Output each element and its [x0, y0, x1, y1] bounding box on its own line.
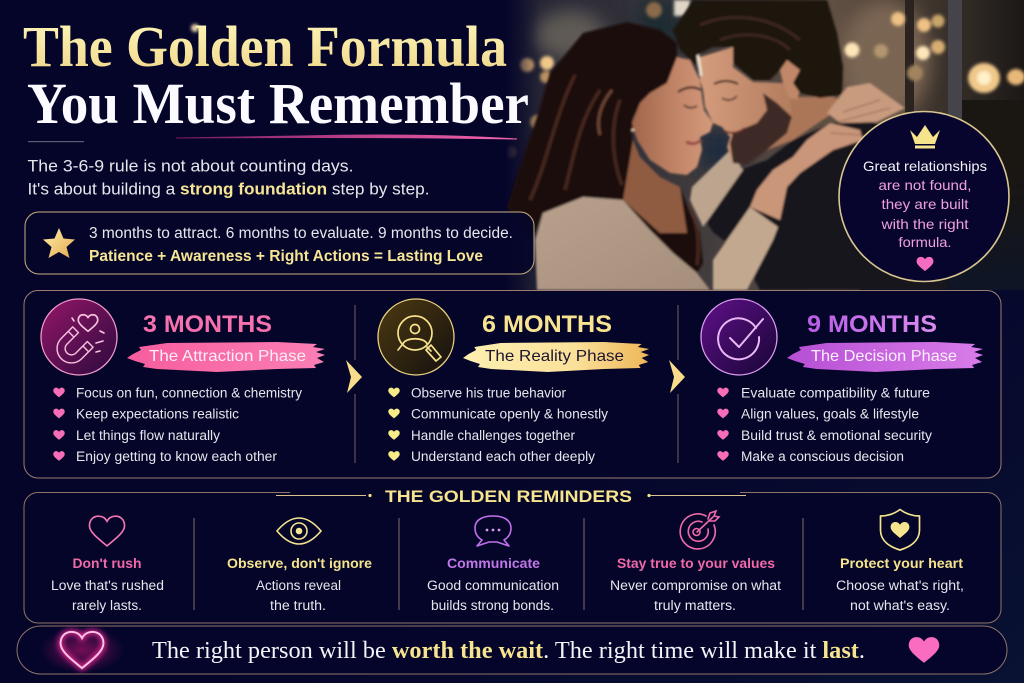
- beard: [730, 93, 792, 165]
- phase: 6 months: [378, 299, 649, 464]
- bullet list: Enjoy getting to know each other: [76, 449, 278, 464]
- title: You Must Remember: [27, 71, 529, 136]
- reminder text: not what's easy.: [850, 598, 950, 613]
- icon: eye: [277, 518, 321, 544]
- badge text: they are built: [882, 196, 969, 212]
- icon: magnet and heart: [41, 299, 117, 375]
- hands: [750, 123, 863, 220]
- formula line one: 3 months to attract. 6 months to evaluate. 9 months to decide.: [89, 225, 513, 242]
- bullet list: Keep expectations realistic: [76, 406, 239, 422]
- reminder text: truly matters.: [654, 598, 736, 613]
- callout: formula box: [25, 212, 534, 274]
- bullet list: Communicate openly & honestly: [411, 406, 608, 422]
- bullet list: [388, 386, 608, 464]
- badge text: [863, 158, 987, 250]
- section heading: THE GOLDEN REMINDERS: [385, 487, 632, 506]
- reminder text: builds strong bonds.: [431, 598, 554, 613]
- formula line two: Patience + Awareness + Right Actions = Lasting Love: [89, 248, 483, 265]
- title underline: [28, 135, 517, 142]
- reminder text: Actions reveal: [256, 578, 341, 593]
- icon: check circle: [701, 299, 777, 375]
- man's neck: [767, 97, 847, 150]
- reminder: observe: [227, 518, 372, 613]
- man's face: [700, 47, 793, 163]
- icon: crown: [910, 125, 940, 148]
- reminder text: Choose what's right,: [836, 578, 964, 593]
- man's ear: [780, 60, 803, 100]
- phase label banner: The Decision Phase: [811, 348, 957, 365]
- reminder heading: Communicate: [447, 555, 540, 571]
- icon: heart outline: [89, 516, 125, 546]
- reminder heading: Protect your heart: [840, 555, 963, 571]
- facial details: [684, 96, 737, 108]
- woman's neck: [623, 140, 687, 233]
- panel: golden reminders: [24, 487, 1001, 623]
- badge text: formula.: [898, 234, 952, 250]
- closing message: The right person will be worth the wait. The right time will make it last.: [152, 638, 865, 664]
- phase: 3 months: [41, 299, 325, 464]
- bullet list: Evaluate compatibility & future: [741, 386, 930, 400]
- icon: chat bubble: [475, 516, 511, 546]
- reminder text: [610, 578, 781, 613]
- bullet list: Make a conscious decision: [741, 449, 904, 464]
- heading: 6 MONTHS: [482, 311, 612, 338]
- intro text: The 3-6-9 rule is not about counting days.: [28, 158, 353, 176]
- bullet list: Understand each other deeply: [411, 449, 595, 464]
- heading: 9 MONTHS: [807, 311, 937, 338]
- arrow: [346, 360, 362, 393]
- bullet list: Align values, goals & lifestyle: [741, 406, 919, 422]
- woman's sweater: [535, 197, 710, 290]
- arrow: [669, 360, 685, 393]
- bullet list: Build trust & emotional security: [741, 428, 932, 443]
- intro text: It's about building a strong foundation step by step.: [28, 180, 430, 198]
- closing banner: [17, 626, 1007, 674]
- bullet list: [53, 386, 302, 464]
- reminder text: [256, 578, 341, 613]
- reminder: don't rush: [51, 516, 164, 613]
- phase label banner: [463, 342, 649, 372]
- icon: pink heart: [909, 637, 939, 663]
- phase label banner: The Attraction Phase: [149, 348, 306, 365]
- reminder text: Good communication: [427, 578, 559, 593]
- reminder text: [427, 578, 559, 613]
- heading: 3 MONTHS: [143, 311, 272, 338]
- bullet list: Focus on fun, connection & chemistry: [76, 386, 302, 400]
- intro text: [28, 158, 430, 198]
- icon: star: [43, 228, 75, 258]
- badge text: with the right: [880, 216, 969, 232]
- reminder: values: [610, 511, 781, 613]
- reminder text: the truth.: [270, 598, 326, 613]
- phase label banner: [127, 342, 325, 372]
- icon: heart: [917, 257, 933, 271]
- icon: person in magnifier: [378, 299, 454, 375]
- section heading: [276, 487, 746, 506]
- reminder: protect: [836, 510, 964, 613]
- woman's face: [632, 57, 713, 175]
- reminder text: Never compromise on what: [610, 578, 781, 593]
- bullet list: Handle challenges together: [411, 428, 575, 443]
- icon: shield with heart: [880, 510, 920, 550]
- reminder heading: Observe, don't ignore: [227, 555, 372, 571]
- phase: 9 months: [701, 299, 983, 464]
- bullet list: Let things flow naturally: [76, 428, 220, 443]
- panel: three phases: [24, 290, 1001, 478]
- photo: embracing couple with bokeh lights: [191, 0, 1024, 290]
- badge: quote circle: [839, 112, 1009, 282]
- reminder text: [836, 578, 964, 613]
- reminder text: [51, 578, 164, 613]
- icon: target and arrow: [680, 511, 719, 549]
- reminder heading: Stay true to your values: [617, 555, 775, 571]
- reminder heading: Don't rush: [72, 555, 142, 571]
- phase label banner: The Reality Phase: [485, 348, 624, 365]
- badge text: are not found,: [878, 177, 972, 193]
- title: [23, 14, 529, 136]
- woman's hair: [507, 22, 703, 273]
- bullet list: [717, 386, 932, 464]
- man's sweater: [703, 120, 950, 290]
- reminder: communicate: [427, 516, 559, 613]
- badge text: Great relationships: [863, 158, 987, 174]
- reminder text: rarely lasts.: [72, 598, 142, 613]
- reminder text: Love that's rushed: [51, 578, 164, 593]
- phase label banner: [787, 342, 983, 372]
- bullet list: Observe his true behavior: [411, 386, 567, 400]
- man's hair: [673, 0, 843, 98]
- title: The Golden Formula: [23, 14, 507, 79]
- icon: neon heart: [61, 632, 103, 668]
